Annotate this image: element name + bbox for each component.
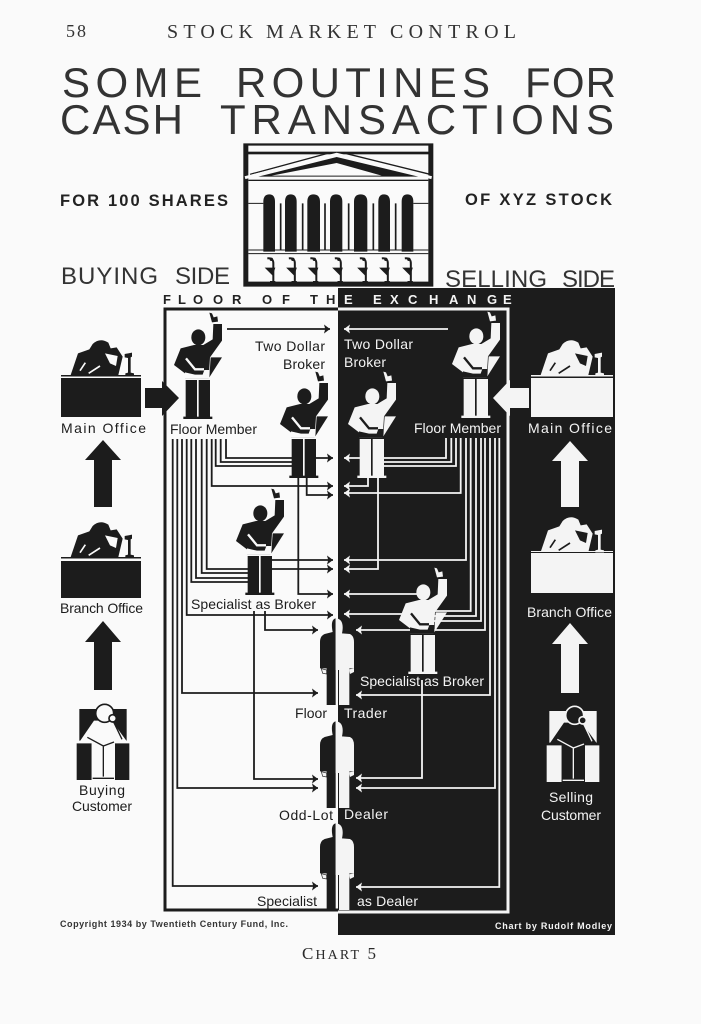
heading: floor of the exchange, buying half: FLOOR OF TH (163, 292, 335, 307)
icon: arrow main office to floor, buying (145, 381, 179, 416)
arrow: customer to branch, selling (552, 623, 588, 693)
panel: selling side black field (338, 288, 615, 935)
label: specialist as broker, buying: Specialist as Broker (191, 596, 316, 612)
figure: floor trader (320, 618, 354, 705)
heading: buying side (61, 263, 230, 290)
figure: two dollar broker, selling (348, 372, 396, 478)
copyright note: Copyright 1934 by Twentieth Century Fund, Inc. (60, 919, 288, 929)
label: buying customer: Customer (72, 798, 132, 814)
title: SOME (62, 59, 202, 106)
icon: main office clerk, selling (541, 340, 604, 375)
figure: floor member, buying (174, 313, 222, 419)
selling side routing lines (344, 329, 499, 887)
label: floor trader, buying half: Floor (295, 705, 327, 721)
icon: arrow main office to floor, selling (493, 380, 529, 416)
icon: selling customer (547, 706, 599, 783)
label: floor trader, selling half: Trader (344, 705, 387, 721)
figure: odd-lot dealer (320, 721, 354, 808)
label: as dealer: as Dealer (357, 893, 418, 909)
icon: branch office clerk, buying (71, 522, 134, 557)
arrow: branch to main, buying (85, 440, 121, 507)
title: FOR (525, 59, 616, 106)
heading: selling side: SIDE (562, 266, 615, 293)
heading: floor of the exchange, selling half: E EXCHANGE (344, 292, 512, 307)
title: ROUTINES (236, 59, 490, 106)
arrow: customer to branch, buying (85, 621, 121, 690)
label: branch office, selling: Branch Office (527, 604, 612, 620)
running header: MARKET (266, 21, 376, 43)
page number: 58 (66, 21, 86, 41)
figure: floor member, selling (452, 312, 500, 418)
label: main office, buying: Main Office (61, 420, 146, 436)
subtitle left: FOR 100 SHARES (60, 192, 228, 210)
labels: two dollar broker, selling: Broker (344, 354, 386, 370)
labels: two dollar broker, buying: Two Dollar (255, 338, 325, 354)
heading: selling side: SELLING (445, 266, 547, 293)
title (60, 59, 616, 143)
label: specialist: Specialist (257, 893, 317, 909)
label: odd-lot, buying half: Odd-Lot (279, 807, 333, 823)
label: floor member, buying: Floor Member (170, 421, 257, 437)
title: TRANSACTIONS (220, 96, 614, 143)
label: buying customer: Buying (79, 782, 125, 798)
icon: branch office clerk, selling (541, 517, 604, 552)
icon: main office desk, buying (61, 375, 141, 417)
group: buying side chain (60, 340, 146, 814)
labels: two dollar broker, buying: Broker (283, 356, 325, 372)
exchange floor frame: selling (338, 309, 508, 912)
label: selling customer: Customer (541, 807, 601, 823)
buying side routing lines (173, 329, 333, 886)
running header: STOCK (167, 21, 254, 43)
group: selling side chain (527, 340, 613, 823)
figure: specialist as broker, selling (399, 568, 447, 674)
figure: two dollar broker, buying (280, 372, 328, 478)
subtitle right: OF XYZ STOCK (465, 191, 612, 209)
label: floor member, selling: Floor Member (414, 420, 501, 436)
icon: branch office desk, selling (531, 551, 613, 593)
label: selling customer: Selling (549, 789, 593, 805)
label: main office, selling: Main Office (528, 420, 612, 436)
icon: main office clerk, buying (71, 340, 134, 375)
label: specialist as broker, selling: Specialist as Broker (360, 673, 484, 689)
running header: CONTROL (390, 21, 516, 43)
building floor figures (265, 258, 413, 283)
label: dealer, selling half: Dealer (344, 806, 388, 822)
label: selling customer (541, 789, 601, 823)
icon: branch office desk, buying (61, 557, 141, 598)
arrow: branch to main, selling (552, 441, 588, 507)
icon: stock exchange building (243, 143, 433, 287)
figure: specialist as broker, buying (236, 489, 284, 595)
chart credit: Chart by Rudolf Modley (495, 921, 612, 931)
heading: buying side: SIDE (175, 263, 230, 290)
labels: two dollar broker, buying (255, 338, 325, 372)
labels: two dollar broker, selling: Two Dollar (344, 336, 413, 352)
icon: buying customer (77, 704, 129, 781)
running header (167, 21, 516, 43)
labels: two dollar broker, selling (344, 336, 413, 370)
exchange floor frame: buying (165, 309, 338, 910)
figure: specialist as dealer (320, 823, 354, 910)
title: CASH (60, 96, 183, 143)
label: buying customer (72, 782, 132, 814)
heading: selling side (445, 266, 615, 293)
heading: buying side: BUYING (61, 263, 158, 290)
icon: main office desk, selling (531, 375, 613, 417)
label: branch office, buying: Branch Office (60, 600, 143, 616)
chart number caption: CHART 5 (302, 944, 376, 963)
